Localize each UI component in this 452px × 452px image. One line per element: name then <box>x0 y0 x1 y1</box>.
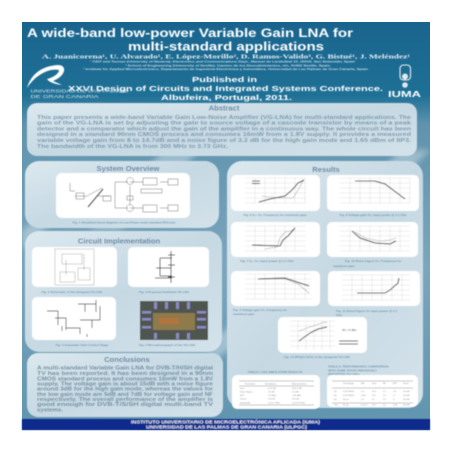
publication note: Albufeira, Portugal, 2011. <box>161 93 292 102</box>
footer bar: INSTITUTO UNIVERSITARIO DE MICROELECTRÓNICA APLICADA (IUMA) <box>131 420 321 425</box>
table II: Technology <box>343 383 354 385</box>
panel: abstract: This paper presents a wide-band Variable Gain Low-Noise Amplifier (VG-LNA) for multi-standard applications. The <box>37 115 411 121</box>
caption: Fig. 7 S₁₁ Vs. Input power @ 3.1 GHz <box>240 259 294 263</box>
authors: A. Juanicorena¹, U. Alvarado¹, E. López-Morillo², D. Ramos-Valido³, G. Bistué¹, J. Meléndez¹ <box>42 54 410 60</box>
logo: ULPGC: DE GRAN CANARIA <box>30 94 100 100</box>
table II: 90 nm <box>343 399 349 401</box>
table II: 2.9 <box>383 395 387 397</box>
caption: Fig. 6 S₁₁ Vs. Frequency for maximum gain <box>243 213 307 217</box>
table II: This <box>334 404 338 406</box>
schematic: VG-LNA <box>32 247 117 287</box>
chart: voltage gain vs frequency <box>231 271 320 306</box>
panel: conclusions: CMOS standard process and consumes 16mW from a 1.8V <box>37 376 214 382</box>
panel: abstract: gain of the VG-LNA is set by adjusting the gate to source voltage of a cascode transistor by means of a peak <box>37 121 411 127</box>
logo: ULPGC <box>27 65 128 100</box>
caption: Fig. 10 Noise Figure Vs. Frequency for <box>345 259 402 263</box>
panel: conclusions: respectively. The overall performance of the amplifier is <box>37 397 213 403</box>
chart: voltage gain vs input power <box>327 175 419 211</box>
panel: conclusions: the low gain mode are 5dB and 7dB for voltage gain and NF <box>37 392 213 398</box>
chart: IIP3 <box>278 317 367 353</box>
caption: Fig. 2 Schematic of the designed VG-LNA <box>42 290 103 294</box>
panel: abstract <box>27 103 417 156</box>
table I: Noise Figure <box>240 390 253 394</box>
table I: Parameter <box>245 382 255 386</box>
affiliations: ¹ CEIT and Tecnun (University of Navarra), Electronics and Communications Dept., Manuel de Lardizábal 15, 20018, San Sebastián, Spain <box>90 60 356 64</box>
table I: Bandwidth <box>240 402 251 404</box>
caption: Fig. 9 Voltage gain Vs. Frequency for <box>233 308 288 312</box>
table II: BW <box>361 383 364 385</box>
table I: 1.65 dBm <box>292 395 302 397</box>
chart: S11 vs frequency <box>231 175 320 211</box>
table II: 14.7 <box>372 404 377 406</box>
table II: 12.1 <box>372 395 377 397</box>
table II heading: REPORTED VG-LNAs <box>328 372 360 376</box>
caption: Fig. 4 Automatic Gain Control Stage <box>56 343 109 347</box>
schematic: automatic gain control <box>32 297 116 340</box>
logo: IUMA <box>388 65 421 99</box>
logo: IUMA: IUMA <box>388 90 421 99</box>
table II: 3.1 <box>383 391 387 393</box>
schematic: feedback VG-LNA <box>128 247 209 287</box>
panel: conclusions: systems. <box>37 408 64 414</box>
chart: noise figure vs frequency <box>327 222 418 257</box>
chart: IIP3: IIP₃ = 8 dBm <box>342 328 357 332</box>
table II: Gain <box>372 383 377 385</box>
caption: maximum gain <box>333 264 355 268</box>
caption: Fig. 9 Voltage gain Vs. input power @ 3.1 GHz <box>339 213 407 217</box>
table I: Gain <box>240 388 245 390</box>
table II <box>327 375 418 407</box>
panel: conclusions: TV has been reported. It has been designed in a 90nm <box>37 371 214 377</box>
table II: 0.18 CMOS <box>343 391 354 393</box>
affiliations: ³ Institute for Applied Microelectronics, Departamento de Ingeniería Electrónica y Automática, Universidad de Las Palmas de Gran Canaria, Spain <box>83 67 369 71</box>
table II: 2-5 <box>361 399 365 401</box>
table II: 3.2 <box>383 404 387 406</box>
panel: abstract: variable voltage gain from 8 to 14.7dB and a noise figure of 3.2 dB for the high gain mode and 1.65 dBm of IIP3. <box>37 138 412 144</box>
panel: abstract: designed in a standard 90nm CMOS process and consumes 16mW from a 1.8V supply. It provides a measured <box>37 132 411 138</box>
title <box>27 27 354 53</box>
panel: circuit implementation: Circuit Implementation <box>78 236 160 246</box>
footer bar: UNIVERSIDAD DE LAS PALMAS DE GRAN CANARIA (ULPGC) <box>146 424 308 429</box>
caption: Fig. 12 IIP3@3.1GHz of the designed VG-LNA <box>284 355 351 359</box>
table II: 0 <box>393 399 395 401</box>
table I: 1.5 dBm <box>268 395 276 397</box>
chip micrograph <box>140 301 208 340</box>
chart: noise figure vs input power <box>328 271 420 306</box>
caption: Fig. 11 Noise Figure Vs input power @ 3.1 <box>336 309 398 313</box>
caption: GHz <box>336 313 343 317</box>
table I: 3.2 dB <box>292 392 299 394</box>
publication note <box>68 75 383 102</box>
affiliations: ² School of Engineering (University of Seville), Camino de los Descubrimientos, s/n, 41092 Seville, Spain <box>125 63 331 67</box>
panel: conclusions <box>27 353 223 417</box>
chart: S11 vs input power <box>231 222 320 257</box>
table II: 10 <box>372 399 375 401</box>
panel: abstract: The bandwidth of the VG-LNA is from 300 MHz to 3.73 GHz. <box>37 144 229 150</box>
table II: 0.8-6 <box>361 395 367 397</box>
footer bar <box>22 419 430 430</box>
table I: IIP3 <box>240 395 245 397</box>
panel: conclusions: around 3dB for the high gain mode, whereas the values for <box>37 387 213 393</box>
table I: 0.3-3.73 GHz <box>292 402 305 404</box>
caption: Fig. 1 Simplified block diagram of Low-Power multi-standard RXfronts <box>73 220 176 224</box>
panel: abstract: detector and a comparator which adjust the gain of the amplifier in a continuous way. The whole circuit has been <box>37 126 411 132</box>
table II: NF <box>383 383 387 385</box>
table II: Power <box>403 382 409 385</box>
table II: 1-5 <box>361 391 365 393</box>
table I heading: TABLE I. LNA SIMULATION RESULTS <box>248 370 302 374</box>
panel: results <box>227 161 423 409</box>
table II: [2] <box>334 395 337 397</box>
table II: 12 mW <box>403 395 410 397</box>
caption: Fig. 5 Microphotograph of the VG-LNA <box>139 343 196 347</box>
table I: 16 mW <box>268 398 276 400</box>
table II: 0.13 CMOS <box>343 395 354 397</box>
panel: system overview <box>25 161 219 228</box>
table I: 6-17 dB <box>268 388 276 390</box>
table II: 1.65 <box>393 404 398 406</box>
table II: 16 mW <box>403 404 410 406</box>
table II heading <box>328 364 389 376</box>
table I: Simulations <box>265 382 277 386</box>
panel: system overview: System Overview <box>97 164 160 173</box>
table II: 90 nm <box>343 404 349 406</box>
title: multi-standard applications <box>128 40 324 53</box>
table II: 14.5 <box>372 391 377 393</box>
caption <box>333 259 402 268</box>
caption <box>336 309 398 317</box>
table II: IIP3 <box>393 383 398 385</box>
table I: Measurements <box>292 382 307 386</box>
table II heading: WITH SOME STATE PREVIOUSLY <box>328 368 378 372</box>
caption: Fig. 3 Proposed feedback VG-LNA <box>139 290 190 294</box>
publication note: XXVI Design of Circuits and Integrated Systems Conference. <box>68 84 383 93</box>
panel: conclusions: A multi-standard Variable Gain LNA for DVB-T/H/SH digital <box>37 366 214 372</box>
table I <box>232 375 320 409</box>
title: A wide-band low-power Variable Gain LNA for <box>27 27 354 40</box>
table II: 10 mW <box>403 391 410 393</box>
panel: results: Results <box>312 165 340 174</box>
logo: ULPGC: UNIVERSIDAD DE LAS PALMAS <box>30 89 128 95</box>
caption: maximum gain <box>233 312 255 316</box>
affiliations <box>83 60 369 71</box>
table II: [3] <box>334 399 337 401</box>
panel: abstract: Abstract <box>209 104 240 112</box>
table II: -4 <box>393 395 396 397</box>
table I: 8-14.7 dB <box>292 388 302 390</box>
table II: 14 mW <box>403 399 410 401</box>
publication note: Published in <box>192 75 258 84</box>
panel: conclusions: good enough for DVB-T/S/SH digital multi-band TV <box>37 402 214 408</box>
table I: Power <box>240 398 246 400</box>
panel: conclusions: supply. The voltage gain is about 15dB with a noise figure <box>37 382 213 388</box>
caption <box>233 308 288 316</box>
table II: 3.5 <box>383 399 387 401</box>
block diagram <box>56 173 190 218</box>
table II heading: TABLE II. PERFORMANCE COMPARISON <box>328 364 389 368</box>
panel: conclusions: Conclusions <box>104 355 150 364</box>
table I: 2-5 dB <box>268 392 275 394</box>
table II: 0.3-3.7 <box>361 404 368 406</box>
table II: [1] <box>334 391 337 393</box>
table II: 1.8 <box>393 391 397 393</box>
table I: 16 mW <box>292 398 300 400</box>
panel: circuit implementation <box>25 231 222 352</box>
table I: 0.3-3.7 GHz <box>268 402 280 404</box>
